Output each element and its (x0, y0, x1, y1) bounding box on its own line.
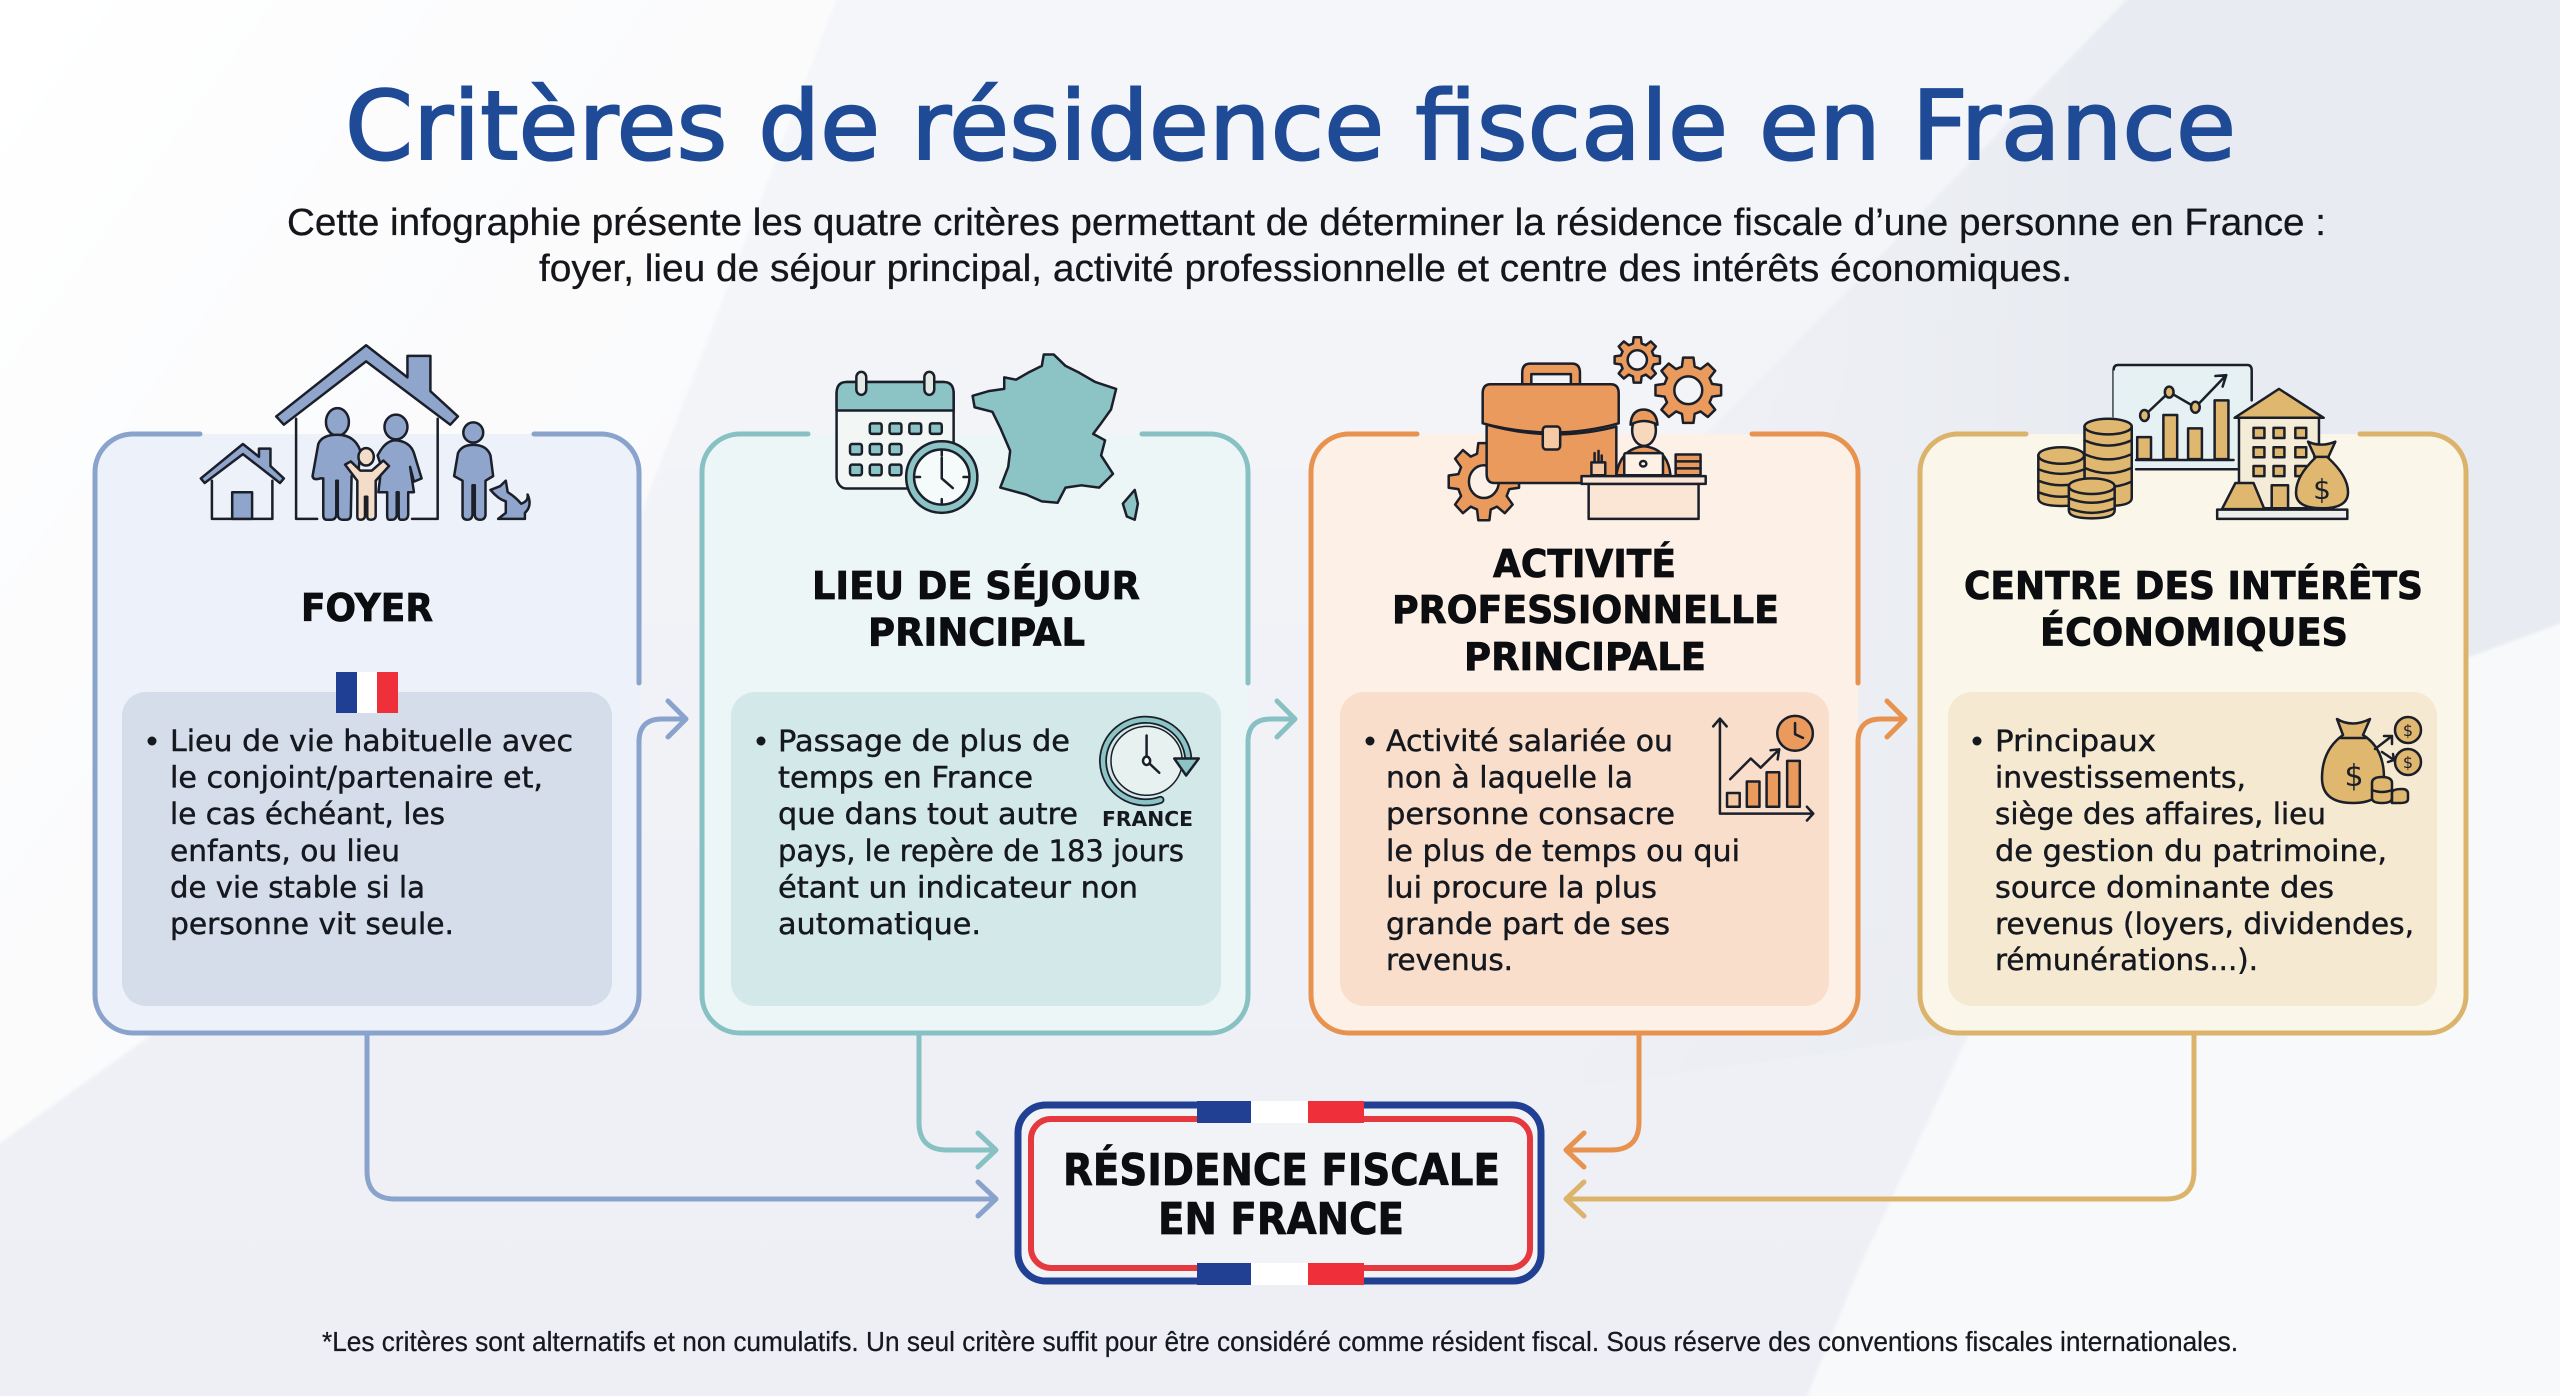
arrow: sejour to residence (919, 1034, 996, 1167)
text: sejour bullet: étant un indicateur non (778, 870, 1138, 904)
text: centre bullet: siège des affaires, lieu (1995, 797, 2326, 831)
text: activite bullet: Activité salariée ou (1386, 724, 1673, 758)
text: foyer bullet: enfants, ou lieu (170, 834, 400, 868)
icon: tricolor band bottom (1197, 1263, 1364, 1285)
icon: money bag with coins: $ (2403, 721, 2413, 740)
panel: foyer (95, 345, 686, 1033)
subtitle: foyer, lieu de séjour principal, activité professionnelle et centre des intérêts économiques. (539, 248, 2072, 290)
text: centre bullet: de gestion du patrimoine, (1995, 834, 2387, 868)
heading: centre des interets (1964, 562, 2423, 656)
arrow: foyer to residence (367, 1034, 996, 1216)
label: residence: RÉSIDENCE FISCALE (1063, 1145, 1500, 1196)
text: foyer bullet: de vie stable si la (170, 870, 425, 904)
icon: money bag with coins (2322, 717, 2421, 803)
text: sejour bullet: temps en France (778, 760, 1033, 794)
label: residence (1063, 1145, 1500, 1245)
icon: money bag with coins: $ (2344, 759, 2364, 794)
text: activite bullet: grande part de ses (1386, 907, 1670, 941)
heading: lieu de sejour (812, 562, 1140, 656)
text: sejour bullet: pays, le repère de 183 jours (778, 834, 1184, 868)
icon: coins, chart and building (2038, 365, 2348, 519)
icon: coins, chart and building: $ (2313, 473, 2331, 506)
text: sejour bullet: automatique. (778, 907, 981, 941)
text: activite bullet: lui procure la plus (1386, 870, 1657, 904)
text: centre bullet (1972, 724, 2414, 977)
heading: foyer: FOYER (301, 586, 433, 631)
icon: money bag with coins: $ (2403, 753, 2413, 772)
heading: activite: ACTIVITÉ (1493, 540, 1676, 587)
text: foyer bullet: le cas échéant, les (170, 797, 445, 831)
label: residence: EN FRANCE (1158, 1195, 1404, 1245)
icon: clock with france label: FRANCE (1102, 807, 1193, 831)
icon: french flag (336, 672, 398, 713)
text: sejour bullet: que dans tout autre (778, 797, 1078, 831)
icon: tricolor band top (1197, 1101, 1364, 1123)
text: foyer bullet (148, 724, 573, 941)
text: activite bullet: non à laquelle la (1386, 760, 1633, 794)
footnote: *Les critères sont alternatifs et non cumulatifs. Un seul critère suffit pour être considéré comme résident fiscal. Sous réserve des conventions fiscales internationales. (322, 1326, 2238, 1357)
icon: rising bar chart with clock (1713, 716, 1813, 821)
text: foyer bullet: personne vit seule. (170, 907, 454, 941)
text: centre bullet: investissements, (1995, 760, 2246, 794)
text: activite bullet (1366, 724, 1740, 977)
text: centre bullet: source dominante des (1995, 870, 2334, 904)
text: centre bullet: revenus (loyers, dividendes, (1995, 907, 2414, 941)
panel: centre des interets (1920, 365, 2466, 1033)
result box: residence fiscale en france (1018, 1101, 1541, 1285)
heading: lieu de sejour: PRINCIPAL (868, 610, 1085, 656)
heading: activite (1392, 540, 1779, 680)
arrow: centre to residence (1566, 1034, 2194, 1216)
heading: activite: PROFESSIONNELLE (1392, 588, 1779, 633)
text: centre bullet: rémunérations...). (1995, 943, 2258, 977)
panel: lieu de sejour (702, 354, 1295, 1033)
text: centre bullet: Principaux (1995, 724, 2156, 758)
text: sejour bullet: Passage de plus de (778, 724, 1070, 758)
text: foyer bullet: Lieu de vie habituelle avec (170, 724, 573, 758)
icon: clock with france label (1102, 720, 1199, 831)
heading: centre des interets: ÉCONOMIQUES (2040, 608, 2348, 656)
text: activite bullet: revenus. (1386, 943, 1513, 977)
heading: lieu de sejour: LIEU DE SÉJOUR (812, 562, 1140, 609)
panel: activite professionnelle (1311, 337, 1905, 1033)
subtitle (287, 202, 2326, 290)
subtitle: Cette infographie présente les quatre critères permettant de déterminer la résidence fiscale d’une personne en France : (287, 202, 2326, 244)
arrow: activite to residence (1566, 1034, 1639, 1167)
icon: calendar and map of france (837, 354, 1138, 520)
title: Critères de résidence fiscale en France (345, 72, 2236, 182)
icon: family and house (201, 345, 530, 520)
text: foyer bullet: le conjoint/partenaire et, (170, 760, 543, 794)
text: activite bullet: le plus de temps ou qui (1386, 834, 1740, 868)
text: activite bullet: personne consacre (1386, 797, 1675, 831)
icon: briefcase, gears and worker (1449, 337, 1721, 520)
heading: centre des interets: CENTRE DES INTÉRÊTS (1964, 562, 2423, 609)
text: sejour bullet (756, 724, 1184, 941)
heading: activite: PRINCIPALE (1464, 635, 1706, 680)
